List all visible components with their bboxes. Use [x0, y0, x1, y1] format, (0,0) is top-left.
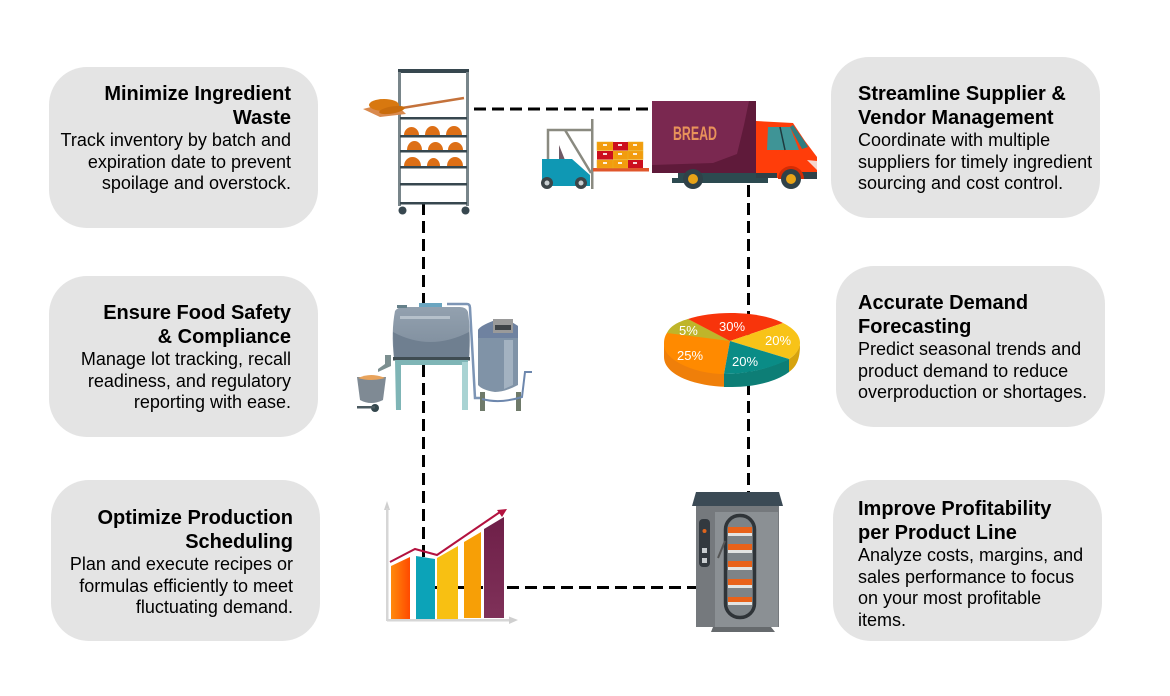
- pie labels: 5%: [679, 323, 698, 338]
- panel: ensure food safety: [49, 276, 318, 437]
- text: minimize ingredient waste: [60, 83, 291, 193]
- pie labels: 20%: [732, 354, 758, 369]
- text: optimize production scheduling: fluctuating demand.: [136, 597, 293, 617]
- text: improve profitability: [858, 498, 1083, 630]
- pie labels: 30%: [719, 319, 745, 334]
- text: minimize ingredient waste: Waste: [233, 107, 291, 129]
- text: streamline supplier: [858, 83, 1092, 193]
- text: ensure food safety: Ensure Food Safety: [103, 302, 291, 324]
- icon: bread rack: [363, 69, 470, 214]
- text: streamline supplier: suppliers for timely ingredient: [858, 152, 1092, 172]
- truck label: BREAD: [673, 124, 717, 145]
- pie labels: 20%: [765, 333, 791, 348]
- text: accurate demand forecasting: Predict seasonal trends and: [858, 339, 1081, 359]
- text: accurate demand forecasting: Accurate Demand: [858, 292, 1028, 314]
- pie labels: [677, 319, 791, 369]
- text: optimize production scheduling: formulas efficiently to meet: [79, 576, 293, 596]
- text: accurate demand forecasting: product demand to reduce: [858, 361, 1068, 381]
- text: improve profitability: sales performance to focus: [858, 567, 1074, 587]
- icon: delivery truck: [652, 101, 817, 189]
- text: ensure food safety: reporting with ease.: [134, 392, 291, 412]
- pie labels: 25%: [677, 348, 703, 363]
- panel: accurate demand forecasting: [836, 266, 1105, 427]
- text: streamline supplier: Streamline Supplier &: [858, 83, 1066, 105]
- text: minimize ingredient waste: Minimize Ingredient: [104, 83, 291, 105]
- text: ensure food safety: Manage lot tracking, recall: [81, 349, 291, 369]
- text: minimize ingredient waste: expiration date to prevent: [88, 152, 291, 172]
- text: improve profitability: Improve Profitability: [858, 498, 1051, 520]
- text: ensure food safety: & Compliance: [158, 326, 291, 348]
- text: optimize production scheduling: Scheduling: [185, 531, 293, 553]
- connector: dashed route: [424, 109, 748, 590]
- text: improve profitability: per Product Line: [858, 522, 1017, 544]
- text: accurate demand forecasting: Forecasting: [858, 316, 971, 338]
- text: streamline supplier: Coordinate with multiple: [858, 130, 1050, 150]
- text: accurate demand forecasting: [858, 292, 1087, 402]
- panel: streamline supplier: [831, 57, 1100, 218]
- panel: improve profitability: [833, 480, 1102, 641]
- text: ensure food safety: [81, 302, 291, 412]
- text: ensure food safety: readiness, and regulatory: [88, 371, 291, 391]
- icon: forklift with crates: [541, 119, 649, 189]
- icon: bakery oven: [692, 492, 783, 632]
- text: optimize production scheduling: Plan and execute recipes or: [70, 554, 293, 574]
- text: streamline supplier: sourcing and cost control.: [858, 173, 1063, 193]
- text: improve profitability: Analyze costs, margins, and: [858, 545, 1083, 565]
- text: accurate demand forecasting: overproduction or shortages.: [858, 382, 1087, 402]
- text: improve profitability: items.: [858, 610, 906, 630]
- icon: processing tanks: [357, 303, 532, 412]
- chart: rising bars: [384, 501, 518, 624]
- panel: minimize ingredient waste: [49, 67, 318, 228]
- chart: 3D pie: [664, 313, 800, 387]
- text: streamline supplier: Vendor Management: [858, 107, 1054, 129]
- text: optimize production scheduling: [70, 507, 293, 617]
- text: improve profitability: on your most profitable: [858, 588, 1041, 608]
- text: optimize production scheduling: Optimize Production: [97, 507, 293, 529]
- text: minimize ingredient waste: spoilage and overstock.: [102, 173, 291, 193]
- panel: optimize production scheduling: [51, 480, 320, 641]
- text: minimize ingredient waste: Track inventory by batch and: [61, 130, 291, 150]
